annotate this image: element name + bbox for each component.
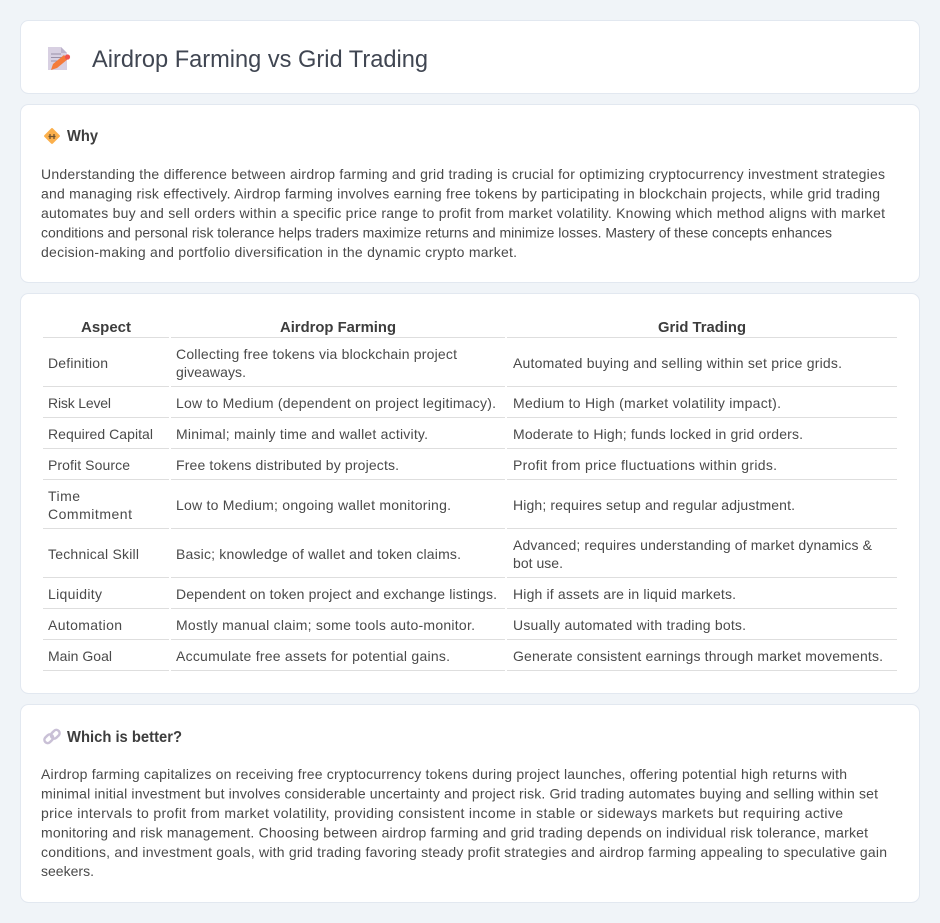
row: definition: giveaways. (176, 364, 246, 380)
text block: why paragraph: decision-making and portfolio diversification in the dynamic crypto market. (41, 244, 517, 260)
row: liquidity: Liquidity (48, 586, 102, 602)
panel: why (20, 104, 920, 282)
row: main goal: Generate consistent earnings through market movements. (513, 648, 883, 664)
row: required capital (48, 426, 803, 442)
row: required capital: Minimal; mainly time and wallet activity. (176, 426, 428, 442)
row: required capital: Required Capital (48, 426, 153, 442)
row: technical skill: Technical Skill (48, 546, 139, 562)
row: time commitment: Low to Medium; ongoing wallet monitoring. (176, 497, 451, 513)
row: automation: Automation (48, 617, 122, 633)
row: risk level: Medium to High (market volatility impact). (513, 395, 781, 411)
row: technical skill: Advanced; requires understanding of market dynamics & (513, 537, 873, 553)
row: risk level: Low to Medium (dependent on project legitimacy). (176, 395, 496, 411)
icon: warning diamond (44, 128, 60, 144)
row: profit source: Free tokens distributed by projects. (176, 457, 399, 473)
title: Airdrop Farming vs Grid Trading (92, 46, 428, 73)
row: main goal (48, 648, 883, 664)
text block: which is better paragraph: price intervals to profit from market volatility, providing consistent income in stable or sideways markets but requiring active (41, 805, 843, 821)
row: main goal: Main Goal (48, 648, 112, 664)
text block: which is better paragraph: conditions, and investment goals, with grid trading favoring steady profit strategies and airdrop farming appealing to speculative gain (41, 844, 887, 860)
icon: link (43, 729, 61, 744)
row: technical skill (48, 537, 873, 571)
text block: which is better paragraph: seekers. (41, 863, 94, 879)
row: time commitment (48, 488, 795, 522)
row: automation: Usually automated with trading bots. (513, 617, 746, 633)
table header: Aspect (81, 319, 131, 336)
panel: which is better (20, 704, 920, 902)
row: profit source: Profit Source (48, 457, 130, 473)
row: main goal: Accumulate free assets for potential gains. (176, 648, 450, 664)
text block: why paragraph (41, 166, 885, 260)
row: definition: Automated buying and selling within set price grids. (513, 355, 842, 371)
row: liquidity: Dependent on token project and exchange listings. (176, 586, 497, 602)
panel: comparison table (20, 294, 920, 694)
panel: title header (20, 20, 920, 94)
row: time commitment: High; requires setup and regular adjustment. (513, 497, 795, 513)
row: technical skill: bot use. (513, 555, 563, 571)
table header: Grid Trading (658, 319, 746, 336)
text block: which is better paragraph: Airdrop farming capitalizes on receiving free cryptocurrency tokens during project launches, offering potential high returns with (41, 766, 847, 782)
row: automation: Mostly manual claim; some tools auto-monitor. (176, 617, 475, 633)
row: automation (48, 617, 746, 633)
row: technical skill: Basic; knowledge of wallet and token claims. (176, 546, 461, 562)
heading: why: Why (67, 128, 98, 145)
table header: Airdrop Farming (280, 319, 396, 336)
row: risk level: Risk Level (48, 395, 111, 411)
row: definition: Definition (48, 355, 108, 371)
text block: which is better paragraph (41, 766, 887, 879)
row: time commitment: Commitment (48, 506, 132, 522)
text block: which is better paragraph: monitoring and risk management. Choosing between airdrop farming and grid trading depends on individual risk tolerance, market (41, 824, 868, 840)
row: definition: Collecting free tokens via blockchain project (176, 346, 457, 362)
row: definition (48, 346, 842, 380)
row: liquidity: High if assets are in liquid markets. (513, 586, 736, 602)
table header (81, 319, 746, 336)
row: profit source: Profit from price fluctuations within grids. (513, 457, 777, 473)
row: profit source (48, 457, 777, 473)
text block: why paragraph: and managing risk effectively. Airdrop farming involves earning free tokens by participating in blockchain projects, while grid trading (41, 186, 880, 202)
text block: why paragraph: automates buy and sell orders within a specific price range to profit from market volatility. Knowing which method aligns with market (41, 205, 885, 221)
icon: memo with pencil (48, 47, 70, 70)
text block: why paragraph: conditions and personal risk tolerance helps traders maximize returns and minimize losses. Mastery of these concepts enhances (41, 224, 832, 240)
row: risk level (48, 395, 781, 411)
text block: why paragraph: Understanding the difference between airdrop farming and grid trading is crucial for optimizing cryptocurrency investment strategies (41, 166, 885, 182)
text block: which is better paragraph: minimal initial investment but involves considerable uncertainty and project risk. Grid trading automates buying and selling within set (41, 786, 878, 802)
row: liquidity (48, 586, 736, 602)
heading: which is better: Which is better? (67, 729, 182, 746)
row: time commitment: Time (48, 488, 80, 504)
row: required capital: Moderate to High; funds locked in grid orders. (513, 426, 803, 442)
